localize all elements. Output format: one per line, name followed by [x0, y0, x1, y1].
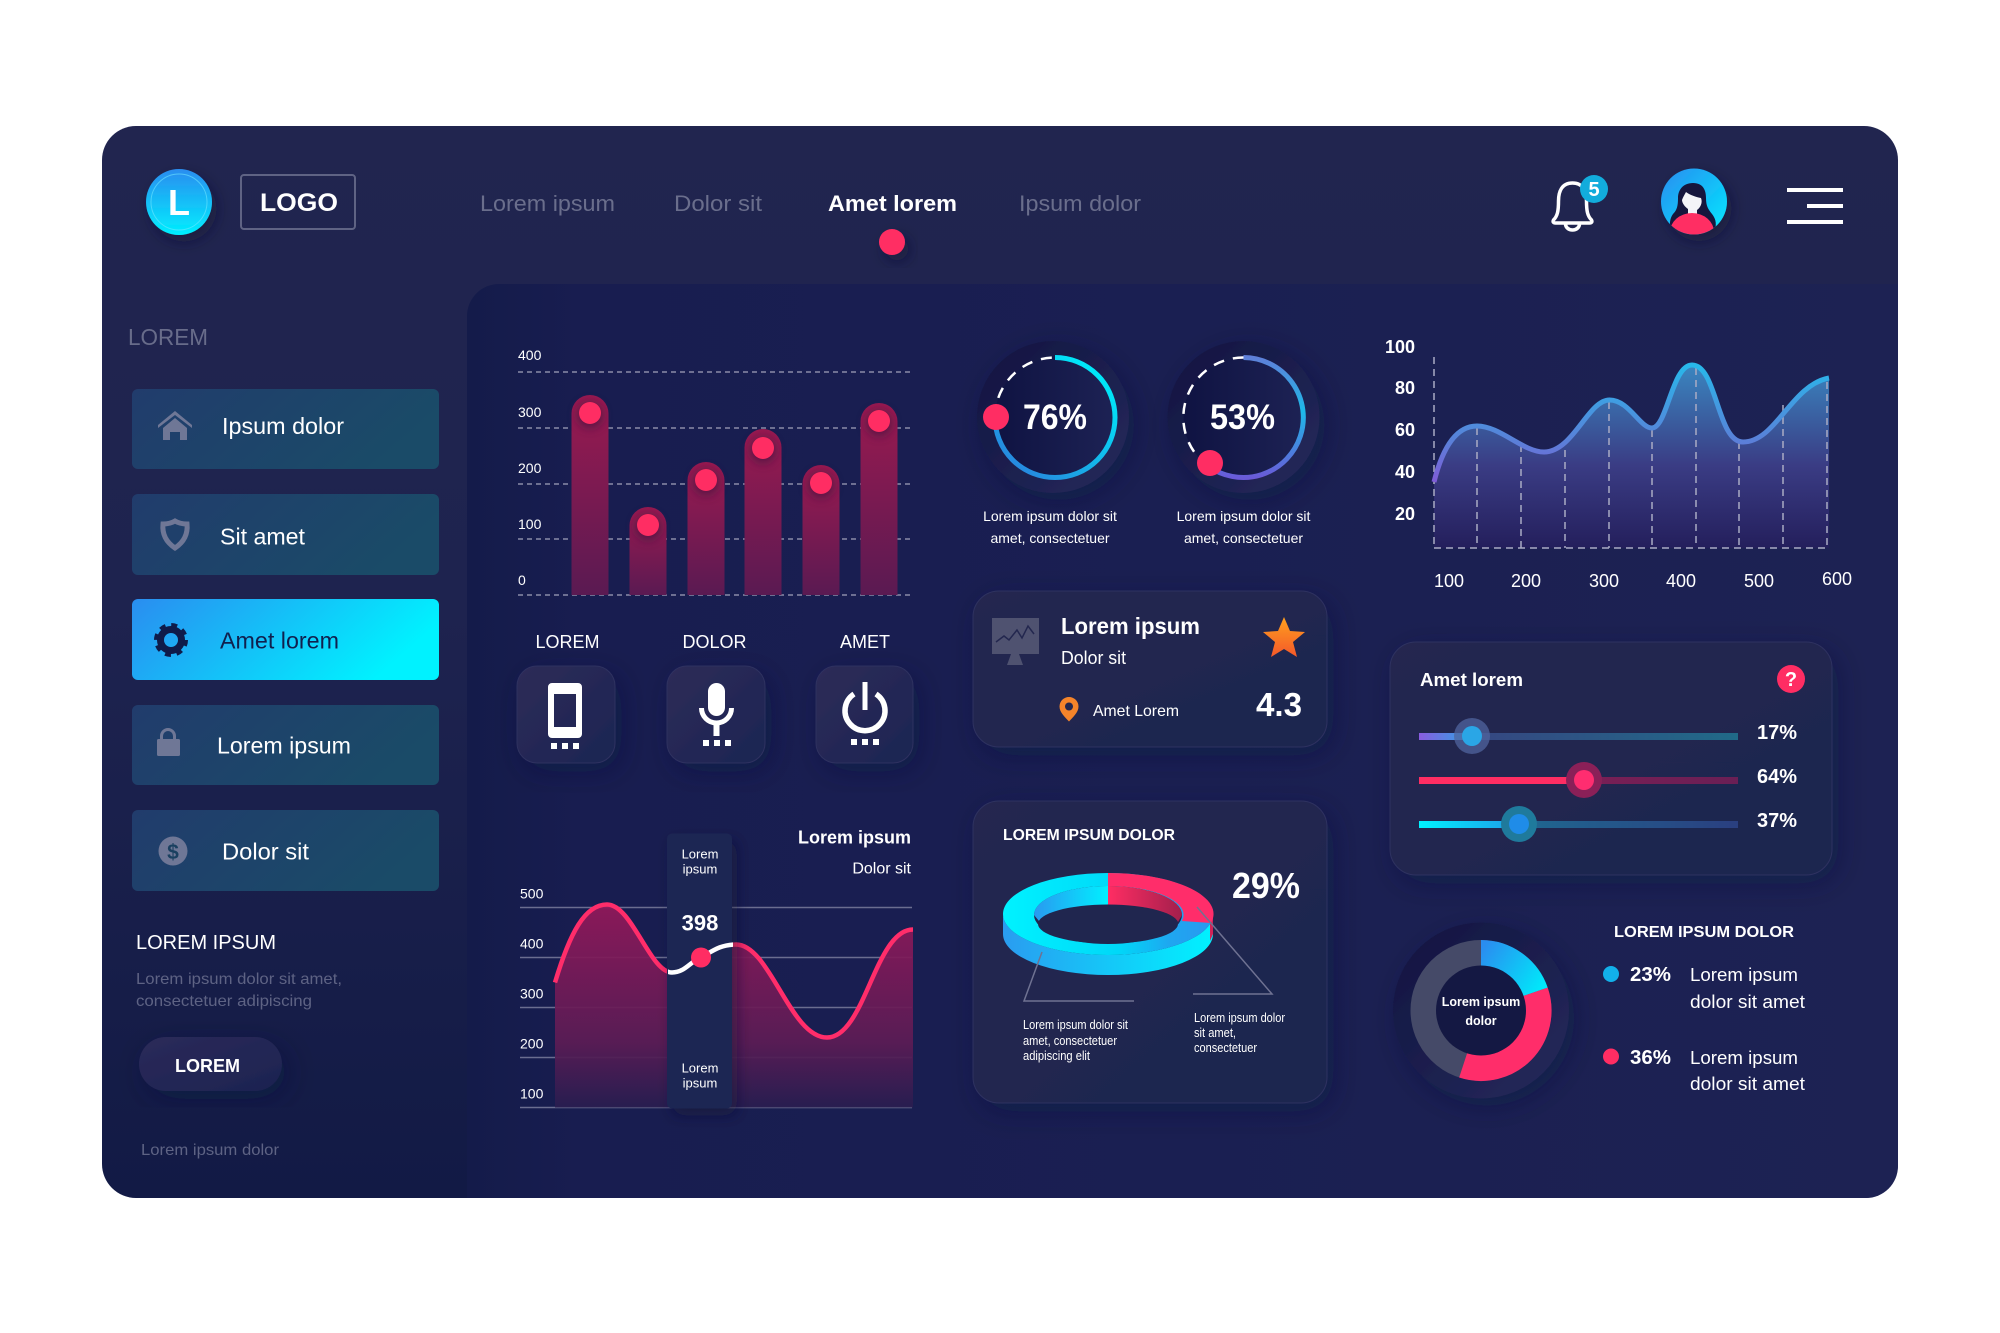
donut caption right: sit amet,: [1194, 1025, 1236, 1040]
sidebar text block: Lorem ipsum dolor sit amet,: [136, 971, 342, 988]
donut caption left: Lorem ipsum dolor sit: [1023, 1017, 1128, 1032]
button: AMET power: [816, 632, 913, 763]
area chart x labels: 300: [1589, 571, 1619, 591]
gauge: 76 percent: 76%: [1023, 398, 1087, 437]
ring chart: dolor: [1465, 1014, 1497, 1028]
area fill: [1434, 365, 1829, 548]
gauge: 53 percent: Lorem ipsum dolor sit: [1177, 508, 1311, 524]
area chart x labels: 400: [1666, 571, 1696, 591]
donut caption left: amet, consectetuer: [1023, 1033, 1118, 1048]
icon: bell with badge: [1553, 175, 1608, 230]
icon: question badge: ?: [1785, 669, 1797, 691]
logo box: [241, 175, 355, 229]
icon: star: [1263, 617, 1305, 657]
rating location and score: [1093, 686, 1302, 723]
bar chart axis labels: 300: [518, 404, 542, 420]
line chart axis labels: 300: [520, 986, 544, 1002]
donut leader lines: [1024, 907, 1272, 1001]
bar chart axis labels: 0: [518, 572, 526, 588]
area chart y labels: 20: [1395, 504, 1415, 524]
icon: monitor: [992, 618, 1039, 665]
rating location and score: Amet Lorem: [1093, 703, 1179, 720]
area chart y labels: 60: [1395, 420, 1415, 440]
sidebar text block: LOREM IPSUM: [136, 932, 276, 954]
slider 17 percent: [1419, 718, 1797, 754]
gauge: 76 percent: amet, consectetuer: [990, 530, 1110, 546]
menu item: Ipsum dolor: Ipsum dolor: [222, 413, 344, 439]
gauge: 76 percent: Lorem ipsum dolor sit: [983, 508, 1117, 524]
legend item 23 percent: [1603, 964, 1805, 1012]
rating title: [1061, 613, 1200, 668]
sidebar heading: LOREM: [128, 324, 208, 350]
area line: [1434, 365, 1829, 482]
line chart: [520, 828, 913, 1108]
tooltip column: Lorem: [682, 846, 718, 862]
line chart title: Lorem ipsum: [798, 828, 911, 848]
button: LOREM phone: [517, 632, 615, 763]
tooltip column: Lorem: [682, 1060, 718, 1076]
navigation: Ipsum dolor: [1019, 191, 1141, 216]
slider 64 percent: 64%: [1757, 766, 1797, 788]
donut caption right: consectetuer: [1194, 1040, 1258, 1055]
line chart title: Dolor sit: [852, 860, 912, 878]
sliders card: [1390, 642, 1832, 875]
button: DOLOR microphone: [667, 632, 765, 763]
menu item: Dolor sit: $: [167, 841, 179, 864]
menu item: Sit amet: [132, 494, 439, 575]
navigation: Dolor sit: [674, 191, 762, 216]
donut card title: 29%: [1232, 865, 1300, 906]
logo badge: L: [168, 182, 190, 223]
bar chart: [518, 347, 914, 595]
ring chart: [1393, 922, 1569, 1098]
legend item 36 percent: Lorem ipsum: [1690, 1048, 1798, 1068]
button: AMET power: AMET: [840, 632, 890, 652]
donut card title: LOREM IPSUM DOLOR: [1003, 827, 1175, 844]
icon: avatar: [1661, 168, 1727, 251]
menu item: Dolor sit: Dolor sit: [222, 838, 310, 864]
tooltip column: [662, 834, 747, 1115]
ring chart: Lorem ipsum: [1442, 995, 1520, 1009]
button: LOREM phone: LOREM: [535, 632, 600, 652]
rating title: Dolor sit: [1061, 648, 1126, 668]
bar chart axis labels: 200: [518, 460, 542, 476]
area chart y labels: [1385, 337, 1415, 524]
area chart y labels: 40: [1395, 462, 1415, 482]
area chart: [1385, 337, 1852, 591]
line chart axis labels: 400: [520, 936, 544, 952]
ring chart legend: [1603, 924, 1805, 1094]
navigation: Lorem ipsum: [480, 191, 615, 216]
header: [146, 168, 1843, 255]
icon: hamburger menu: [1787, 188, 1843, 224]
bar chart axis labels: 100: [518, 516, 542, 532]
icon: location pin: [1060, 697, 1078, 722]
sidebar text block: consectetuer adipiscing: [136, 993, 312, 1010]
slider 17 percent: 17%: [1757, 722, 1797, 744]
area chart x labels: 200: [1511, 571, 1541, 591]
3D donut: [1003, 873, 1214, 975]
legend item 23 percent: dolor sit amet: [1690, 992, 1805, 1012]
donut caption left: adipiscing elit: [1023, 1048, 1090, 1063]
navigation: [480, 191, 1141, 216]
gauge: 53 percent: amet, consectetuer: [1184, 530, 1303, 546]
line chart axis labels: [520, 886, 544, 1102]
line chart axis labels: 200: [520, 1036, 544, 1052]
slider 37 percent: 37%: [1757, 810, 1797, 832]
ring chart legend: LOREM IPSUM DOLOR: [1614, 924, 1794, 941]
pill button: LOREM: [175, 1056, 240, 1076]
icon buttons row: [517, 632, 913, 763]
main content panel: [467, 284, 1898, 1198]
3D donut card: [973, 801, 1327, 1103]
area chart y labels: 100: [1385, 337, 1415, 357]
area chart x labels: [1434, 569, 1852, 591]
wave area: [555, 904, 913, 1108]
legend item 36 percent: dolor sit amet: [1690, 1074, 1805, 1094]
bar chart axis labels: [518, 347, 542, 588]
rating location and score: 4.3: [1256, 686, 1302, 723]
icon: bell with badge: 5: [1588, 179, 1600, 201]
tooltip column: ipsum: [683, 1076, 717, 1090]
sidebar: [128, 324, 439, 1159]
slider 37 percent: [1419, 806, 1797, 842]
tooltip column: ipsum: [683, 862, 717, 876]
rating title: Lorem ipsum: [1061, 613, 1200, 639]
bar markers: [577, 402, 892, 540]
area chart x labels: 500: [1744, 571, 1774, 591]
menu item: Dolor sit: [132, 810, 439, 891]
rating card: [973, 591, 1327, 747]
legend item 36 percent: 36%: [1630, 1047, 1671, 1069]
donut caption left: [1023, 1017, 1128, 1063]
donut caption right: Lorem ipsum dolor: [1194, 1010, 1286, 1025]
area chart x labels: 600: [1822, 569, 1852, 589]
gauge: 53 percent: [1168, 341, 1320, 546]
menu item: Amet lorem active: Amet lorem: [220, 628, 339, 654]
area chart y labels: 80: [1395, 378, 1415, 398]
menu item: Amet lorem active: [132, 599, 439, 680]
bar chart axis labels: 400: [518, 347, 542, 363]
logo box: LOGO: [260, 189, 338, 217]
gauge: 53 percent: 53%: [1210, 398, 1275, 437]
line chart title: [798, 828, 912, 878]
slider 64 percent: [1419, 762, 1797, 798]
legend item 23 percent: 23%: [1630, 964, 1671, 986]
icon: question badge: [1777, 665, 1805, 693]
line chart axis labels: 100: [520, 1086, 544, 1102]
bars: [572, 395, 898, 595]
menu item: Lorem ipsum: [132, 705, 439, 785]
legend item 36 percent: [1603, 1047, 1805, 1094]
pill button: [139, 1037, 282, 1091]
active nav dot: [879, 229, 905, 255]
logo badge: [146, 169, 212, 235]
area chart x labels: 100: [1434, 571, 1464, 591]
donut card title: [1003, 827, 1300, 906]
navigation: Amet lorem: [828, 191, 957, 216]
legend item 23 percent: Lorem ipsum: [1690, 965, 1798, 985]
line chart axis labels: 500: [520, 886, 544, 902]
menu item: Lorem ipsum: Lorem ipsum: [217, 732, 351, 758]
sliders title: Amet lorem: [1420, 670, 1523, 690]
menu item: Ipsum dolor: [132, 389, 439, 469]
gauge: 76 percent: [977, 341, 1129, 546]
sidebar footer text: Lorem ipsum dolor: [141, 1142, 280, 1159]
button: DOLOR microphone: DOLOR: [682, 632, 747, 652]
dashboard card: [102, 126, 1898, 1198]
sidebar text block: [136, 932, 342, 1010]
menu item: Sit amet: Sit amet: [220, 524, 306, 550]
donut caption right: [1194, 1010, 1286, 1055]
tooltip column: 398: [682, 910, 718, 936]
